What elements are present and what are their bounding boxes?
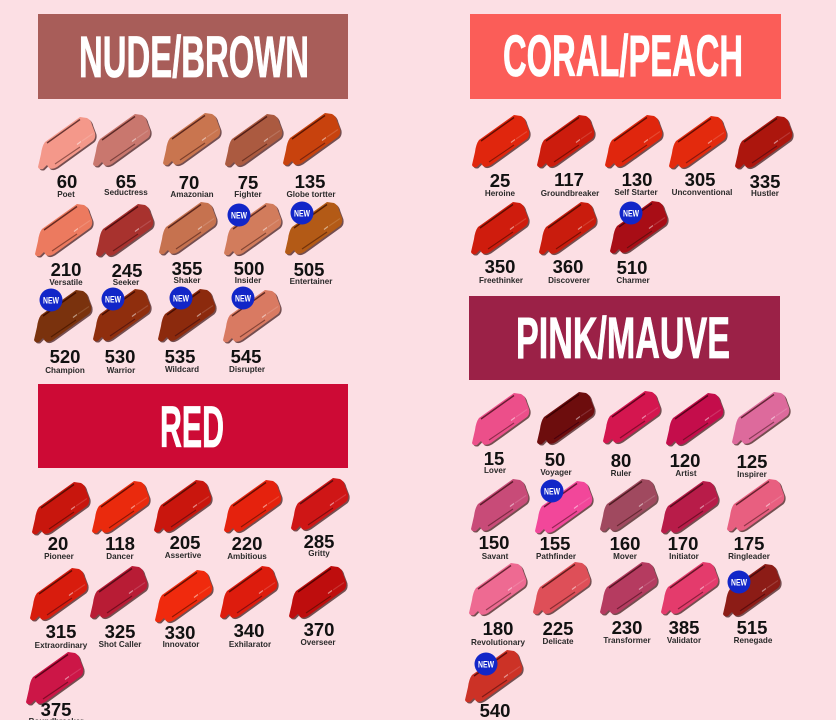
swatch: 385 Validator: Validator (667, 636, 702, 645)
swatch: 155 Pathfinder (535, 480, 594, 561)
heading: pink/mauve (469, 296, 780, 380)
swatch: 315 Extraordinary: 315 (46, 621, 76, 642)
swatch: 305 Unconventional: 305 (685, 169, 715, 190)
swatch: 155 Pathfinder: 155 (540, 533, 570, 554)
swatch: 210 Versatile: Versatile (49, 278, 83, 287)
swatch: 245 Seeker: Seeker (113, 278, 140, 287)
swatch: 500 Insider: Insider (235, 276, 262, 285)
swatch: 25 Heroine: Heroine (485, 189, 516, 198)
swatch: 505 Entertainer: NEW (294, 208, 310, 220)
swatch: 375 (26, 652, 85, 720)
panel: coral/peach (470, 14, 794, 285)
swatch: 150 Savant: Savant (482, 552, 509, 561)
swatch: 350 Freethinker: 350 (485, 256, 515, 277)
swatch: 245 Seeker: 245 (112, 260, 142, 281)
swatch: 325 Shot Caller (90, 566, 149, 649)
swatch: 285 Gritty: 285 (304, 531, 334, 552)
swatch: 15 Lover (472, 393, 531, 475)
swatch: 355 Shaker: 355 (172, 258, 202, 279)
swatch: 305 Unconventional: Unconventional (672, 188, 732, 197)
swatch: 170 Initiator (661, 481, 720, 561)
swatch: 385 Validator (661, 562, 720, 645)
swatch: 520 Champion (34, 288, 93, 375)
swatch: 340 Exhilarator (220, 566, 279, 649)
swatch: 360 Discoverer: 360 (553, 256, 583, 277)
swatch: 230 Transformer: 230 (612, 617, 642, 638)
swatch: 170 Initiator: Initiator (669, 552, 700, 561)
swatch: 325 Shot Caller: 325 (105, 621, 135, 642)
swatch: 535 Wildcard: Wildcard (165, 365, 199, 374)
swatch: 500 Insider (224, 203, 283, 285)
swatch: 150 Savant: 150 (479, 532, 509, 553)
swatch: 135 Globe tortter: 135 (295, 171, 325, 192)
swatch: 360 Discoverer (539, 202, 598, 285)
swatch: 540: NEW (478, 660, 494, 670)
swatch: 118 Dancer: 118 (105, 533, 135, 554)
swatch: 25 Heroine: 25 (490, 170, 510, 191)
swatch: 160 Mover: 160 (610, 533, 640, 554)
swatch: 15 Lover: 15 (484, 448, 504, 469)
swatch: 15 Lover: Lover (484, 466, 507, 475)
swatch: 175 Ringleader: Ringleader (728, 552, 771, 561)
swatch: 315 Extraordinary (30, 568, 89, 650)
swatch: 510 Charmer (610, 201, 669, 285)
swatch: 80 Ruler: 80 (611, 450, 631, 471)
swatch: 20 Pioneer (32, 482, 91, 561)
swatch: 135 Globe tortter: Globe tortter (286, 190, 336, 199)
swatch: 530 Warrior: Warrior (107, 366, 136, 375)
swatch: 180 Revolutionary: 180 (483, 618, 513, 639)
swatch: 75 Fighter (225, 114, 284, 199)
swatch: 545 Disrupter (223, 286, 282, 374)
swatch: 285 Gritty: Gritty (308, 549, 330, 558)
swatch: 330 Innovator: Innovator (163, 640, 200, 649)
swatch: 530 Warrior: 530 (105, 346, 135, 367)
swatch: 355 Shaker: Shaker (174, 276, 201, 285)
swatch: 120 Artist: Artist (675, 469, 697, 478)
swatch: 170 Initiator: 170 (668, 533, 698, 554)
swatch: 205 Assertive (154, 480, 213, 560)
swatch: 120 Artist (666, 393, 725, 478)
swatch: 535 Wildcard (158, 286, 217, 374)
swatch: 160 Mover (600, 479, 659, 561)
swatch: 505 Entertainer: 505 (294, 259, 324, 280)
swatch: 118 Dancer: Dancer (106, 552, 135, 561)
swatch: 335 Hustler: 335 (750, 171, 780, 192)
swatch: 130 Self Starter: 130 (622, 169, 652, 190)
swatch: 540 (465, 650, 524, 720)
swatch: 130 Self Starter: Self Starter (614, 188, 658, 197)
swatch: 70 Amazonian: Amazonian (170, 190, 214, 199)
swatch: 25 Heroine (472, 115, 531, 198)
swatch: 205 Assertive: Assertive (165, 551, 202, 560)
swatch: 155 Pathfinder: NEW (544, 486, 560, 498)
swatch: 505 Entertainer: Entertainer (290, 277, 333, 286)
swatch: 245 Seeker (96, 204, 155, 287)
swatch: 180 Revolutionary (469, 563, 528, 647)
swatch: 285 Gritty (291, 478, 350, 558)
swatch: 230 Transformer (600, 562, 659, 645)
swatch: 510 Charmer: NEW (623, 208, 639, 220)
swatch: 510 Charmer: Charmer (616, 276, 650, 285)
swatch: 117 Groundbreaker (537, 115, 600, 198)
swatch: 330 Innovator: 330 (165, 622, 195, 643)
swatch: 515 Renegade: 515 (737, 617, 767, 638)
swatch: 530 Warrior: NEW (105, 294, 121, 306)
swatch: 65 Seductress: 65 (116, 171, 136, 192)
swatch: 80 Ruler: Ruler (611, 469, 632, 478)
swatch: 117 Groundbreaker: 117 (554, 169, 584, 190)
swatch: 355 Shaker (159, 202, 218, 285)
swatch: 150 Savant (471, 479, 530, 561)
swatch: 230 Transformer: Transformer (603, 636, 651, 645)
swatch: 330 Innovator (155, 570, 214, 649)
heading: nude/brown: NUDE/BROWN (79, 25, 309, 90)
swatch: 120 Artist: 120 (670, 450, 700, 471)
swatch: 520 Champion: NEW (43, 296, 59, 306)
swatch: 70 Amazonian (163, 113, 222, 199)
swatch: 350 Freethinker: Freethinker (479, 276, 524, 285)
swatch: 545 Disrupter: Disrupter (229, 365, 266, 374)
swatch: 375: 375 (41, 699, 71, 720)
swatch: 535 Wildcard: NEW (173, 294, 189, 304)
swatch: 135 Globe tortter (283, 113, 342, 199)
swatch: 65 Seductress: Seductress (104, 188, 148, 197)
swatch: 530 Warrior (93, 288, 152, 375)
swatch: 20 Pioneer: Pioneer (44, 552, 75, 561)
swatch: 125 Inspirer (732, 392, 791, 479)
swatch: 225 Delicate: 225 (543, 618, 573, 639)
swatch: 75 Fighter: Fighter (234, 190, 263, 199)
panel: red (26, 384, 350, 720)
swatch: 360 Discoverer: Discoverer (548, 276, 591, 285)
swatch: 520 Champion: Champion (45, 366, 85, 375)
heading: red (38, 384, 348, 468)
swatch: 180 Revolutionary: Revolutionary (471, 638, 525, 647)
swatch: 510 Charmer: 510 (617, 257, 647, 278)
swatch: 210 Versatile: 210 (51, 259, 81, 280)
heading: coral/peach (470, 14, 781, 99)
swatch: 20 Pioneer: 20 (48, 533, 68, 554)
swatch: 50 Voyager: 50 (545, 449, 565, 470)
swatch: 50 Voyager: Voyager (540, 468, 573, 477)
swatch: 325 Shot Caller: Shot Caller (99, 640, 142, 649)
swatch: 130 Self Starter (605, 115, 664, 197)
swatch: 370 Overseer (289, 566, 348, 647)
swatch: 60 Poet (38, 117, 97, 199)
swatch: 340 Exhilarator: Exhilarator (229, 640, 272, 649)
swatch: 535 Wildcard: 535 (165, 346, 195, 367)
swatch: 370 Overseer: Overseer (300, 638, 336, 647)
swatch: 505 Entertainer (285, 202, 344, 286)
swatch: 75 Fighter: 75 (238, 172, 258, 193)
swatch: 515 Renegade (723, 564, 782, 645)
swatch: 160 Mover: Mover (613, 552, 638, 561)
swatch: 175 Ringleader (727, 479, 786, 561)
swatch: 225 Delicate (533, 562, 592, 646)
swatch: 370 Overseer: 370 (304, 619, 334, 640)
swatch: 220 Ambitious: Ambitious (227, 552, 267, 561)
swatch: 545 Disrupter: NEW (235, 294, 251, 304)
swatch: 175 Ringleader: 175 (734, 533, 764, 554)
swatch: 125 Inspirer: 125 (737, 451, 767, 472)
swatch: 155 Pathfinder: Pathfinder (536, 552, 577, 561)
swatch: 125 Inspirer: Inspirer (737, 470, 768, 479)
swatch: 118 Dancer (92, 481, 151, 561)
swatch: 205 Assertive: 205 (170, 532, 200, 553)
swatch: 545 Disrupter: 545 (231, 346, 261, 367)
swatch: 60 Poet: Poet (57, 190, 75, 199)
swatch: 500 Insider: 500 (234, 258, 264, 279)
swatch: 340 Exhilarator: 340 (234, 620, 264, 641)
swatch: 315 Extraordinary: Extraordinary (35, 641, 88, 650)
swatch: 305 Unconventional (669, 116, 732, 197)
swatch: 50 Voyager (537, 392, 596, 477)
panel: nude/brown (34, 14, 348, 375)
swatch: 65 Seductress (93, 114, 152, 197)
heading: red: RED (160, 395, 224, 460)
swatch: 60 Poet: 60 (57, 171, 77, 192)
swatch: 515 Renegade: NEW (731, 578, 747, 588)
swatch: 210 Versatile (35, 204, 94, 287)
swatch: 350 Freethinker (471, 202, 530, 285)
swatch: 220 Ambitious (224, 480, 283, 561)
panel: pink/mauve (465, 296, 791, 720)
swatch: 500 Insider: NEW (231, 210, 247, 222)
heading: nude/brown (38, 14, 348, 99)
swatch: 117 Groundbreaker: Groundbreaker (541, 189, 600, 198)
swatch: 70 Amazonian: 70 (179, 172, 199, 193)
swatch: 335 Hustler (735, 116, 794, 198)
swatch: 385 Validator: 385 (669, 617, 699, 638)
swatch: 515 Renegade: Renegade (734, 636, 773, 645)
swatch: 80 Ruler (603, 391, 662, 478)
swatch: 335 Hustler: Hustler (751, 189, 780, 198)
swatch: 520 Champion: 520 (50, 346, 80, 367)
swatch: 220 Ambitious: 220 (232, 533, 262, 554)
swatch: 225 Delicate: Delicate (542, 637, 574, 646)
